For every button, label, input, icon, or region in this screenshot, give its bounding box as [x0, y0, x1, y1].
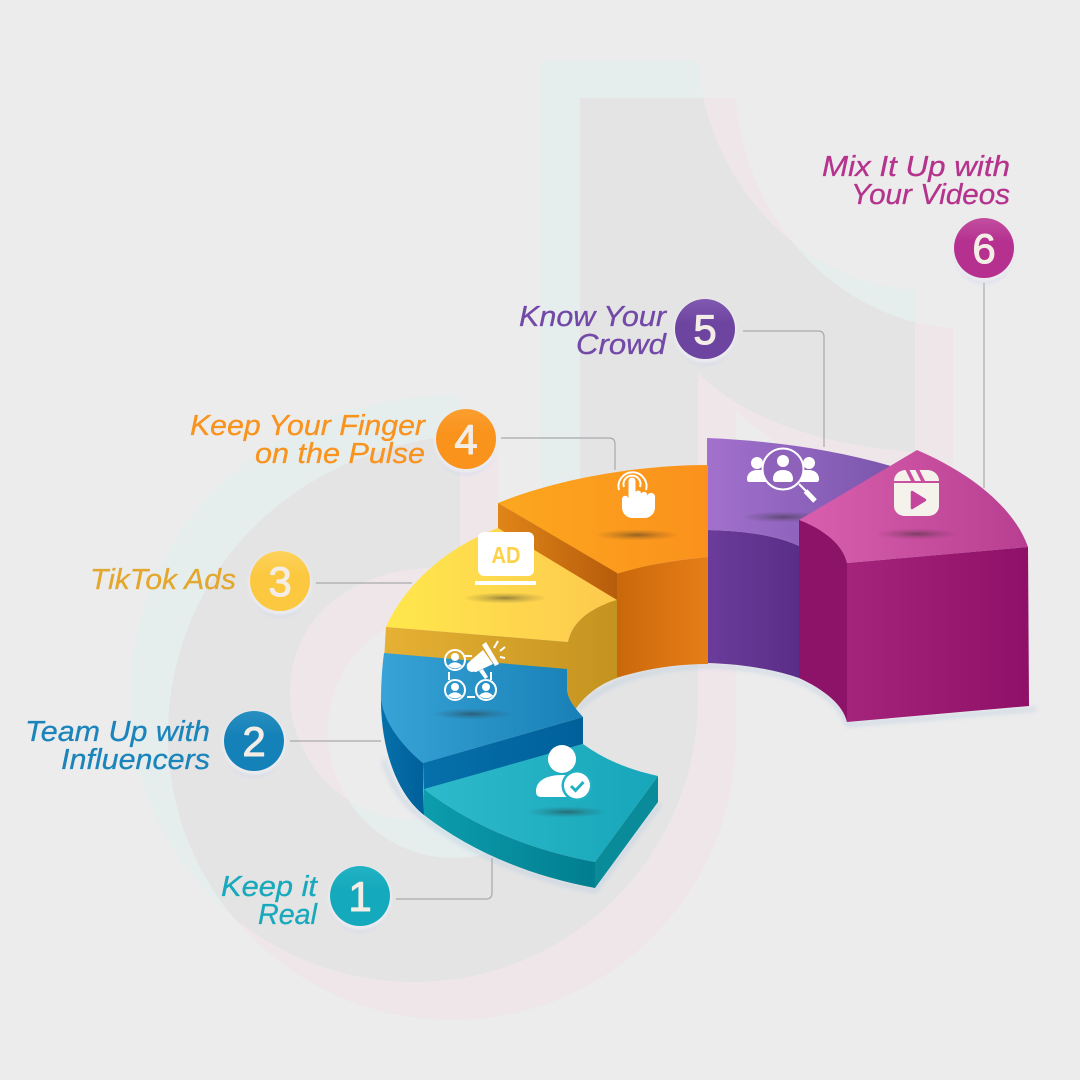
- connector 4: [501, 438, 615, 470]
- infographic canvas: [28, 126, 1036, 979]
- step 1: Keep it Real: 1: [348, 873, 372, 920]
- chart edge shadow: [384, 666, 1036, 891]
- magenta top face: [799, 450, 1028, 563]
- icon: AD laptop: [475, 532, 536, 585]
- segment 4: orange: [498, 465, 708, 678]
- segment 6: magenta: [799, 450, 1029, 722]
- step 1: Keep it Real: Keep it: [221, 871, 319, 903]
- connector 3: [316, 582, 412, 584]
- step 2: Team Up with Influencers: 2: [242, 718, 266, 765]
- background TikTok logo watermark: [180, 126, 872, 979]
- purple top face: [707, 438, 910, 546]
- step 3: TikTok Ads: 3: [268, 558, 292, 605]
- step 6: Mix It Up with Your Videos: Your Videos: [851, 179, 1010, 211]
- step 2: Team Up with Influencers: Team Up with: [25, 716, 210, 748]
- icon: video reels: [894, 469, 939, 516]
- blue outer side: [381, 695, 424, 815]
- teal top face: [424, 744, 658, 862]
- step 3: TikTok Ads: TikTok Ads: [90, 564, 236, 596]
- icon: influencer megaphone network: [445, 641, 505, 700]
- connector 1: [396, 858, 492, 899]
- step 4: Keep Your Finger on the Pulse: Keep Your Finger: [190, 410, 426, 442]
- icon shadows: [432, 528, 957, 818]
- badge halos: [222, 218, 1016, 931]
- segment 2: blue: [381, 653, 583, 815]
- step 5: Know Your Crowd: 5: [693, 306, 717, 353]
- purple front face: [707, 530, 799, 678]
- blue front face: [423, 717, 583, 790]
- step 6: Mix It Up with Your Videos: [822, 151, 1014, 278]
- step 6: Mix It Up with Your Videos: 6: [972, 225, 996, 272]
- step 3: TikTok Ads: [90, 551, 310, 611]
- segment 5: purple: [707, 438, 910, 678]
- orange side face: [498, 503, 617, 610]
- yellow top face: [386, 528, 617, 642]
- step 2: Team Up with Influencers: [25, 711, 284, 776]
- magenta inner face: [799, 520, 847, 722]
- purple shadow: [741, 512, 825, 522]
- step 5: Know Your Crowd: [519, 299, 735, 361]
- icon: AD laptop: AD: [492, 542, 520, 568]
- step 6: Mix It Up with Your Videos: Mix It Up with: [822, 151, 1010, 183]
- step 1: Keep it Real: Real: [258, 899, 319, 931]
- icon: verified person: [536, 745, 592, 801]
- segment 3: yellow: [384, 528, 617, 710]
- icon: audience magnifier: [747, 448, 819, 501]
- step 5: Know Your Crowd: Crowd: [576, 329, 667, 361]
- step 2: Team Up with Influencers: Influencers: [61, 744, 210, 776]
- orange top face: [498, 465, 708, 574]
- step 5: Know Your Crowd: Know Your: [519, 301, 667, 333]
- icon: finger tap: [618, 472, 655, 518]
- step 4: Keep Your Finger on the Pulse: [190, 409, 496, 470]
- connector 2: [290, 740, 381, 742]
- teal right face: [595, 776, 658, 888]
- yellow front face: [384, 600, 617, 710]
- segment 1: teal: [424, 744, 658, 888]
- step 4: Keep Your Finger on the Pulse: 4: [454, 416, 478, 463]
- blue top face: [381, 653, 583, 763]
- teal front face: [424, 789, 595, 888]
- step 1: Keep it Real: [221, 866, 390, 931]
- connector 6: [983, 283, 985, 488]
- orange front face: [616, 557, 708, 678]
- magenta front face: [847, 547, 1029, 722]
- connector 5: [743, 331, 824, 447]
- step 4: Keep Your Finger on the Pulse: on the Pulse: [255, 438, 425, 470]
